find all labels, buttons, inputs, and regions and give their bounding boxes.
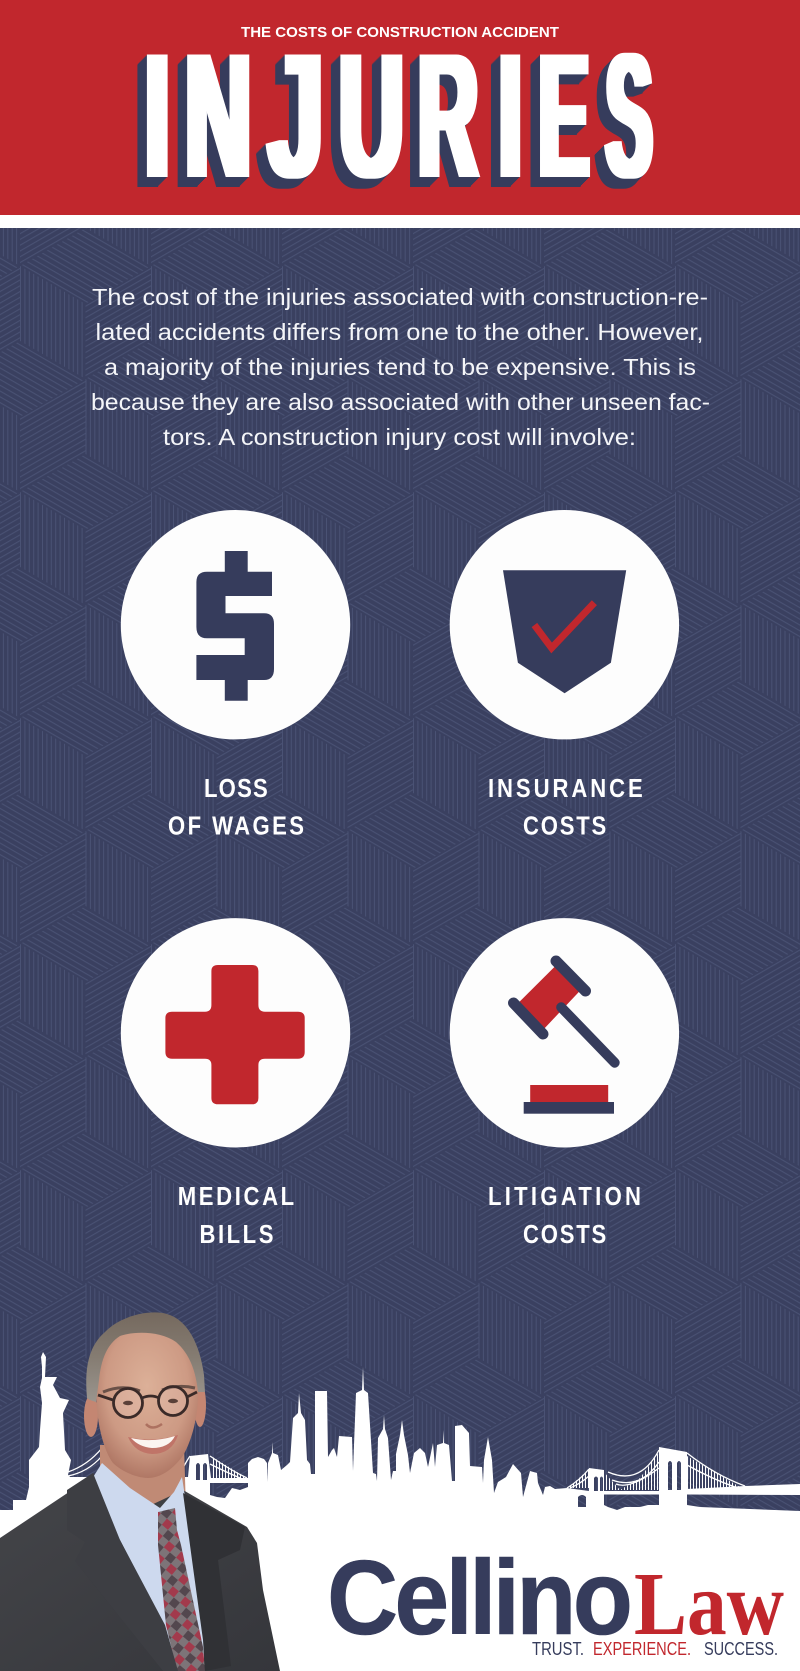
glasses: [98, 1386, 197, 1418]
intro paragraph: The cost of the injuries associated with construction-re-: [92, 284, 708, 310]
tagline: TRUST.: [532, 1639, 584, 1659]
title: INJURIES: N: [185, 16, 252, 215]
tagline: SUCCESS.: [704, 1639, 778, 1659]
intro paragraph: lated accidents differs from one to the other. However,: [96, 319, 704, 345]
title: INJURIES: R: [418, 16, 478, 215]
title: INJURIES: I: [145, 16, 170, 215]
label: insurance costs: INSURANCE: [488, 774, 643, 803]
label: insurance costs: COSTS: [523, 812, 606, 841]
label: insurance costs: [488, 774, 643, 841]
title: INJURIES: E: [538, 16, 588, 215]
city skyline silhouette: [0, 1352, 800, 1671]
title: INJURIES: [137, 16, 654, 215]
panel: red header band: [0, 0, 800, 215]
left lapel: [67, 1473, 178, 1671]
right lapel: [183, 1493, 245, 1671]
intro paragraph: tors. A construction injury cost will involve:: [163, 424, 636, 450]
label: litigation costs: [488, 1182, 641, 1249]
logo: Cellino Law: Cellino: [327, 1538, 633, 1657]
intro paragraph: because they are also associated with other unseen fac-: [91, 389, 710, 415]
neck: [100, 1445, 186, 1510]
face: [96, 1325, 198, 1478]
title: INJURIES: J: [268, 16, 324, 215]
tagline: EXPERIENCE.: [593, 1639, 691, 1659]
label: loss of wages: [168, 774, 304, 841]
label: loss of wages: OF WAGES: [168, 812, 304, 841]
eyebrows: [103, 1386, 195, 1392]
tagline: [532, 1639, 778, 1659]
icon: dollar sign in circle: [121, 510, 350, 739]
shirt: [90, 1463, 205, 1671]
suit jacket: [0, 1473, 280, 1671]
nose: [146, 1424, 162, 1428]
intro paragraph: a majority of the injuries tend to be expensive. This is: [104, 354, 696, 380]
icon: gavel in circle: [450, 918, 679, 1148]
necktie: [158, 1508, 205, 1671]
icon: medical cross in circle: [121, 918, 350, 1148]
smile: [128, 1435, 178, 1454]
photo: smiling lawyer in suit: [0, 1312, 280, 1671]
heading: the costs of construction accident: THE COSTS OF CONSTRUCTION ACCIDENT: [241, 24, 559, 41]
title: INJURIES: S: [606, 16, 652, 215]
right ear: [194, 1383, 206, 1427]
title: INJURIES: U: [339, 16, 403, 215]
hair: [86, 1312, 205, 1402]
intro paragraph: [91, 284, 710, 450]
left ear: [84, 1395, 98, 1437]
label: medical bills: BILLS: [200, 1220, 273, 1249]
label: litigation costs: COSTS: [523, 1220, 606, 1249]
eyes: [123, 1399, 178, 1405]
label: loss of wages: LOSS: [204, 774, 268, 803]
label: medical bills: MEDICAL: [178, 1182, 294, 1211]
icon: shield with check in circle: [450, 510, 679, 739]
logo: Cellino Law: [327, 1538, 784, 1657]
logo: Cellino Law: Law: [634, 1555, 784, 1654]
label: medical bills: [178, 1182, 294, 1249]
title: INJURIES: I: [499, 16, 521, 215]
panel: patterned navy body: [0, 228, 800, 1528]
label: litigation costs: LITIGATION: [488, 1182, 641, 1211]
